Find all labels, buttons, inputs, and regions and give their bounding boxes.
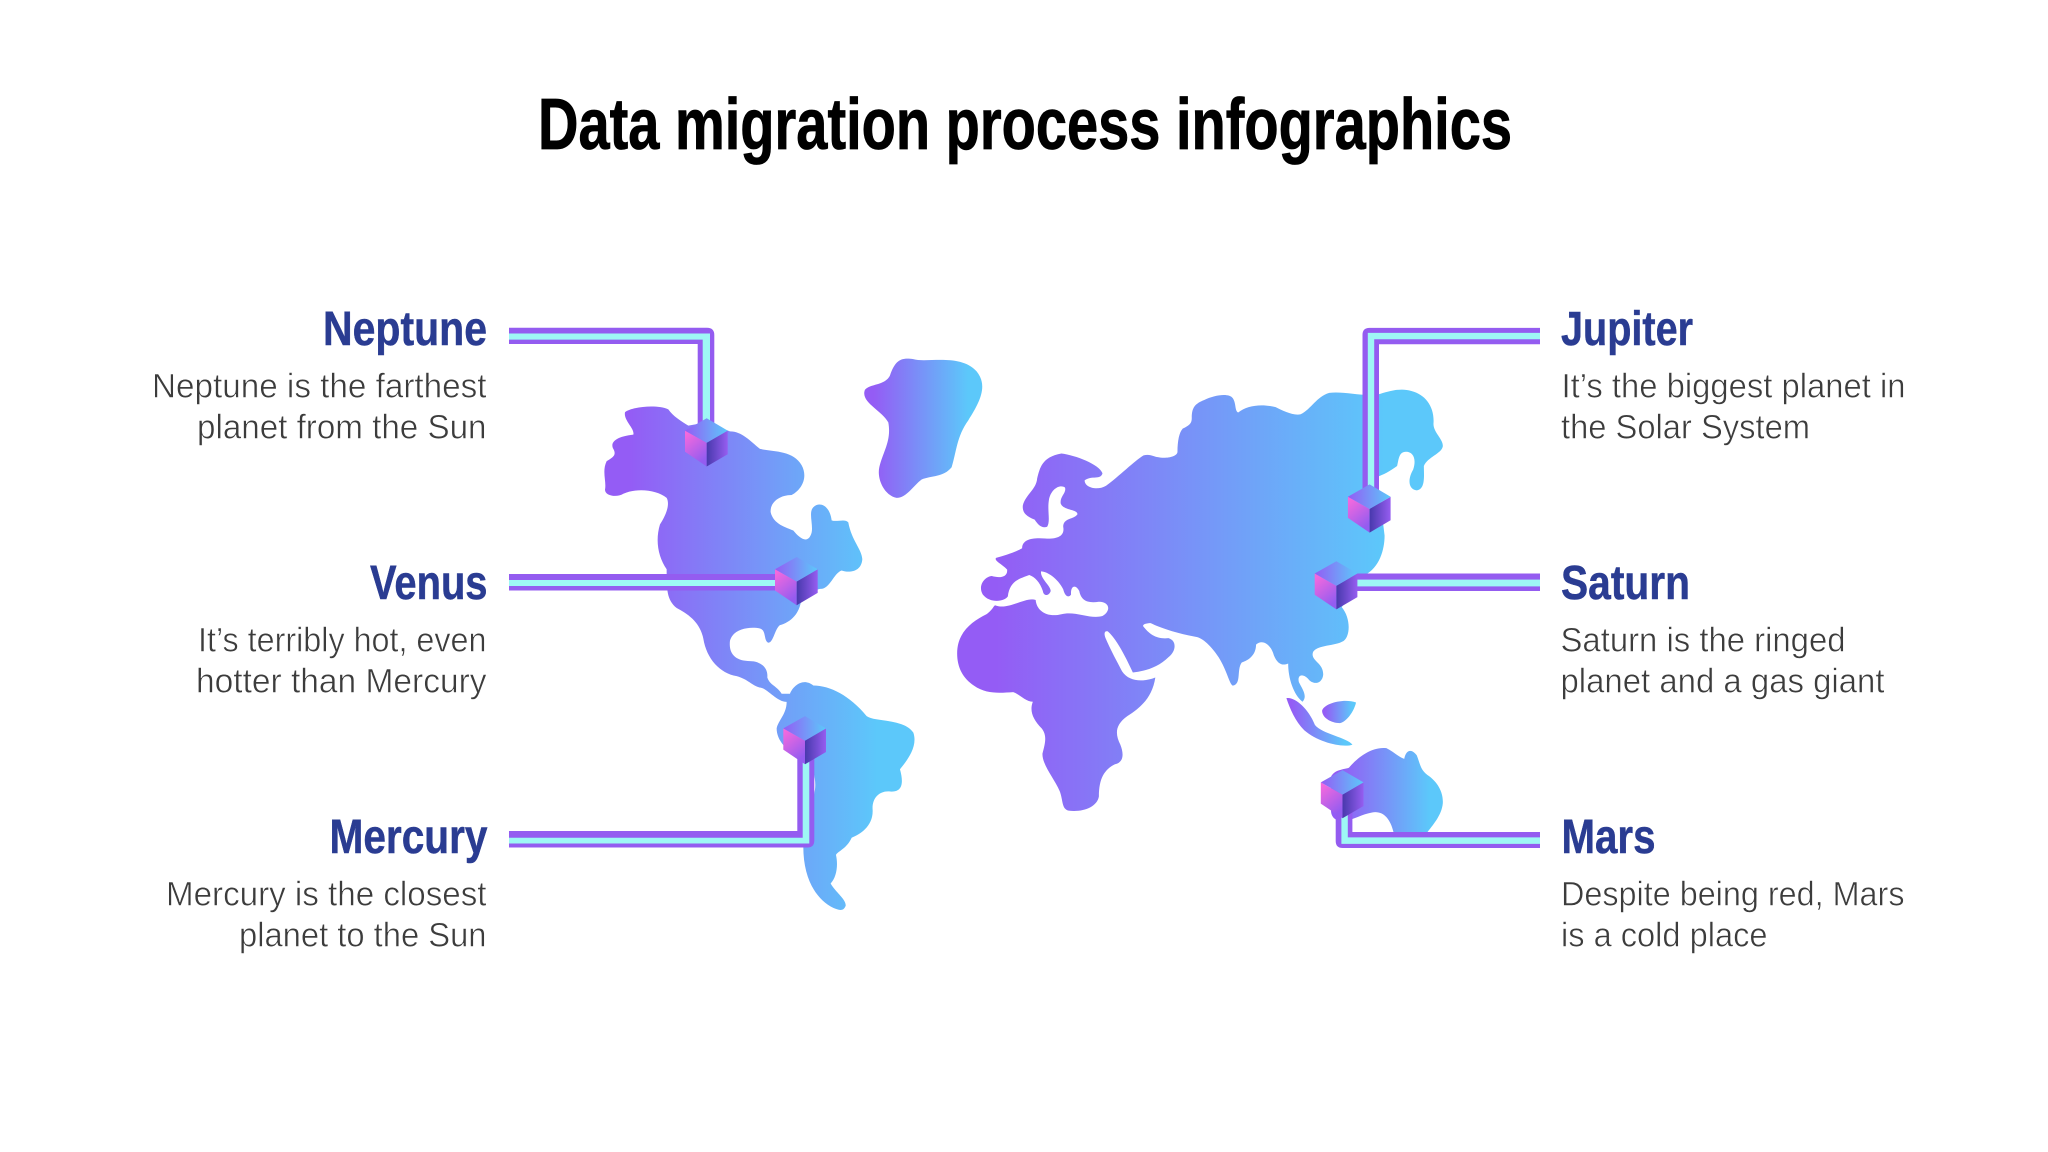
text block: Neptune bbox=[152, 303, 487, 446]
text block: Mars: Despite being red, Mars bbox=[1561, 875, 1904, 913]
text block: Jupiter bbox=[1561, 303, 1906, 446]
connector: Jupiter bbox=[1362, 328, 1540, 495]
map: Greenland bbox=[864, 359, 982, 498]
cube: Mars bbox=[1321, 770, 1364, 818]
title: Data migration process infographics bbox=[538, 85, 1512, 165]
text block: Mercury: Mercury bbox=[330, 811, 488, 864]
connector: Saturn bbox=[1350, 574, 1540, 591]
text block: Mars: is a cold place bbox=[1561, 916, 1768, 954]
text block: Venus: hotter than Mercury bbox=[196, 662, 486, 700]
text block: Jupiter: Jupiter bbox=[1561, 303, 1693, 356]
text block: Jupiter: It’s the biggest planet in bbox=[1562, 367, 1906, 405]
text block: Mercury: planet to the Sun bbox=[239, 916, 486, 954]
text block: Mercury: Mercury is the closest bbox=[166, 875, 487, 913]
text block: Venus: Venus bbox=[370, 557, 488, 610]
text block: Mercury bbox=[166, 811, 488, 954]
cube: Mercury bbox=[783, 716, 826, 764]
text block: Neptune: Neptune is the farthest bbox=[152, 367, 487, 405]
map: Borneo bbox=[1322, 701, 1356, 723]
text block: Saturn bbox=[1560, 557, 1885, 700]
text block: Jupiter: the Solar System bbox=[1561, 408, 1810, 446]
text block: Mars bbox=[1561, 811, 1904, 954]
connector: Neptune bbox=[509, 328, 714, 430]
connector: Mercury bbox=[509, 750, 814, 848]
text block: Neptune: planet from the Sun bbox=[197, 408, 486, 446]
world map bbox=[604, 359, 1443, 910]
text block: Saturn: Saturn bbox=[1561, 557, 1690, 610]
text block: Saturn: Saturn is the ringed bbox=[1560, 621, 1846, 659]
map: Eurasia and Africa bbox=[957, 390, 1443, 811]
text block: Neptune: Neptune bbox=[323, 303, 487, 356]
text block: Venus bbox=[196, 557, 488, 700]
cube: Venus bbox=[775, 557, 818, 605]
map: Sumatra and Java bbox=[1286, 698, 1352, 746]
text block: Mars: Mars bbox=[1562, 811, 1656, 864]
cube: Jupiter bbox=[1348, 484, 1391, 533]
map: Australia bbox=[1331, 748, 1443, 832]
connector: Venus bbox=[509, 574, 779, 590]
text block: Saturn: planet and a gas giant bbox=[1560, 662, 1885, 700]
cube: Saturn bbox=[1315, 561, 1357, 609]
connector: Mars bbox=[1336, 810, 1540, 848]
text block: Venus: It’s terribly hot, even bbox=[198, 621, 486, 659]
cube: Neptune bbox=[685, 418, 728, 466]
map: Americas bbox=[604, 407, 915, 910]
